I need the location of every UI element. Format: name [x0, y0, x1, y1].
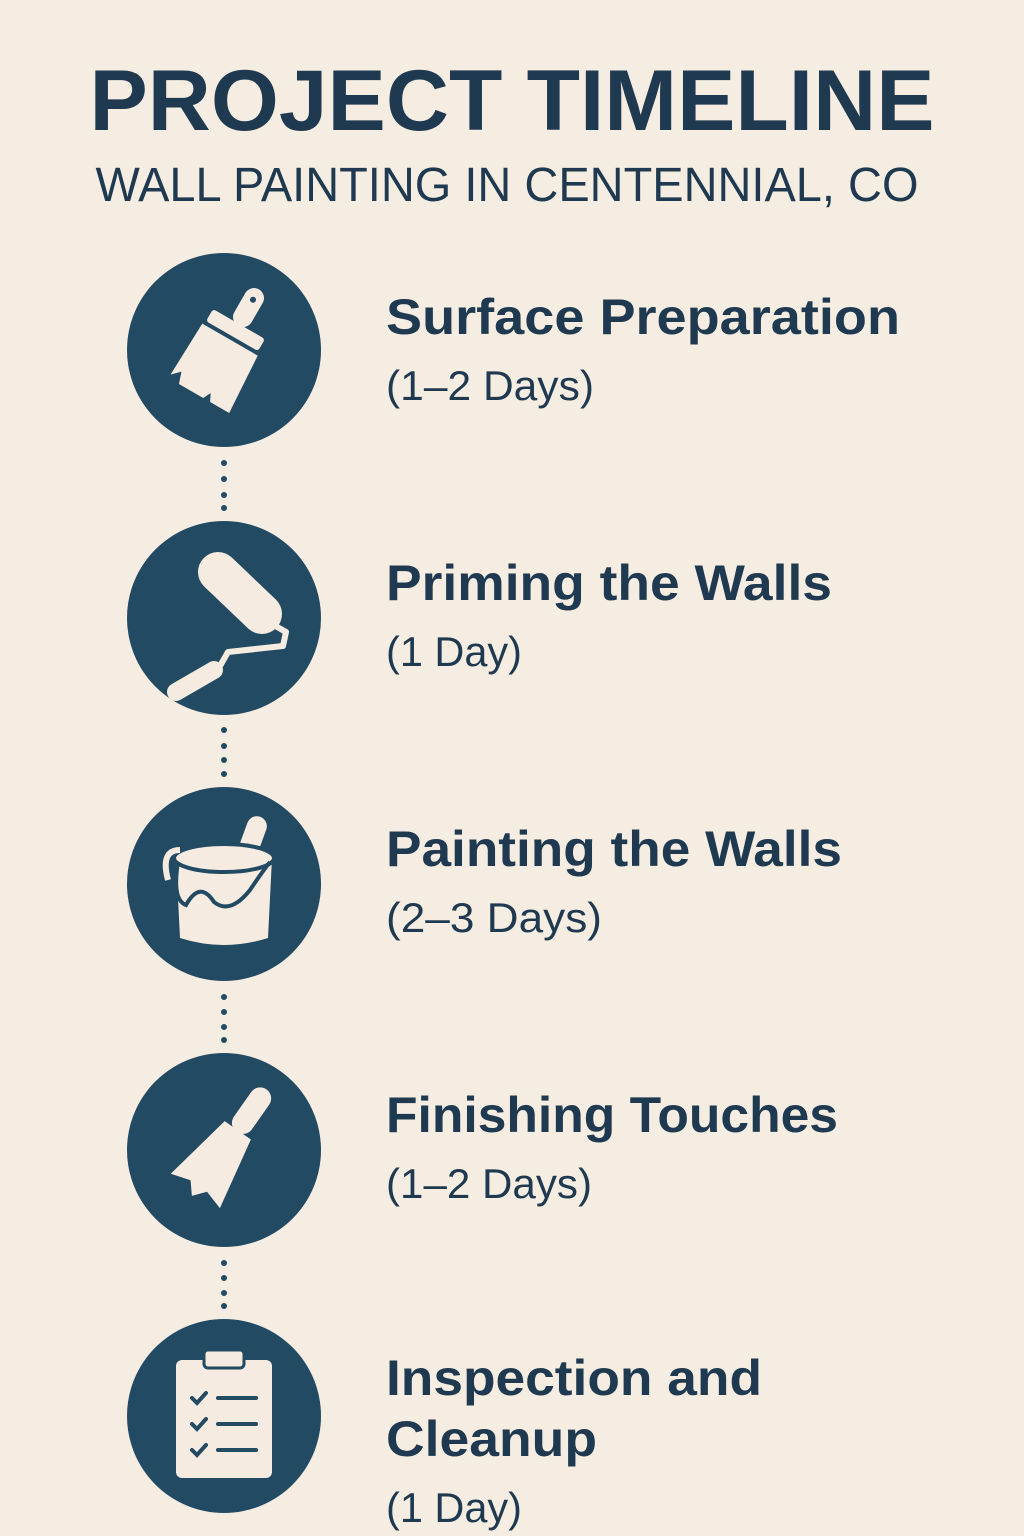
- duration: (1–2 Days): [386, 362, 594, 409]
- icon: paint can: [127, 787, 321, 981]
- subtitle: WALL PAINTING IN CENTENNIAL, CO: [96, 159, 918, 212]
- heading: Inspection and: [386, 1350, 762, 1406]
- title: PROJECT TIMELINE: [90, 53, 934, 149]
- step 5: inspection: Cleanup: [386, 1411, 597, 1467]
- dotted connectors: [221, 460, 227, 1309]
- duration: (1 Day): [386, 1484, 522, 1531]
- step 1: surface preparation: [127, 253, 900, 447]
- icon: small brush: [127, 1053, 321, 1247]
- heading: Priming the Walls: [386, 555, 832, 611]
- heading: Painting the Walls: [386, 821, 842, 877]
- heading: Surface Preparation: [386, 289, 900, 345]
- step 2: priming: [127, 521, 832, 715]
- step 4: finishing touches: [127, 1053, 838, 1247]
- heading: Finishing Touches: [386, 1087, 838, 1143]
- duration: (1–2 Days): [386, 1160, 592, 1207]
- step 5: inspection: [127, 1319, 762, 1531]
- icon: paint roller: [127, 521, 321, 715]
- icon: paint brush: [127, 253, 321, 447]
- duration: (2–3 Days): [386, 894, 602, 941]
- icon: clipboard checklist: [127, 1319, 321, 1513]
- step 3: painting: [127, 787, 842, 981]
- duration: (1 Day): [386, 628, 522, 675]
